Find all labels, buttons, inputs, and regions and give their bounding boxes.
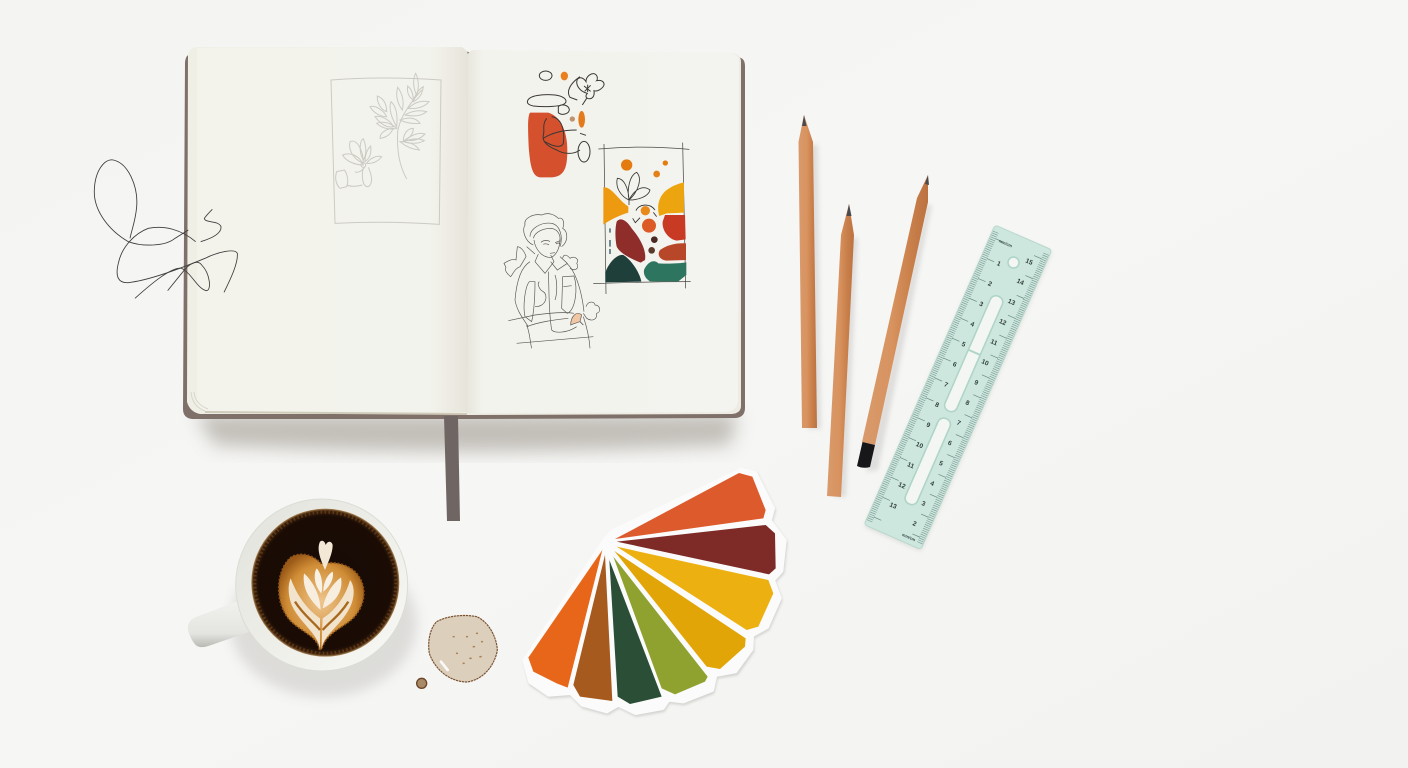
pencil 3 tip (925, 175, 929, 185)
cup outer rim (236, 499, 408, 671)
pencil 2 (827, 204, 858, 497)
ruler numbers: 1 (996, 260, 1002, 268)
ruler numbers: 5 (960, 341, 967, 349)
left page pencil sketch (331, 73, 441, 224)
small coffee drop (417, 678, 427, 688)
pencil 3 body (862, 175, 928, 445)
notebook (183, 47, 745, 521)
notebook shadow (195, 414, 738, 452)
left page layered edges (191, 392, 208, 411)
ruler numbers (875, 238, 1040, 542)
pencil 3 shadow (866, 205, 932, 472)
swatch: orange (528, 550, 602, 688)
figure line drawing (504, 214, 600, 348)
ruler numbers: 6 (951, 361, 958, 369)
ruler numbers: 13 (1007, 298, 1016, 307)
speckled crema ring (255, 512, 396, 653)
swatch: brown (573, 555, 612, 701)
colour study card (593, 143, 691, 294)
latte art (279, 541, 364, 650)
cup shadow (230, 550, 417, 697)
crema (279, 554, 364, 649)
ruler numbers: 4 (929, 480, 935, 488)
ruler numbers: 6 (947, 440, 953, 448)
colour fan (523, 470, 788, 717)
right page (467, 50, 739, 413)
ruler numbers: 9 (925, 422, 932, 430)
ruler numbers: 15 (1024, 258, 1034, 267)
ink scribble (94, 160, 237, 298)
left page stack (187, 47, 468, 414)
ruler body (864, 225, 1052, 549)
ruler tick marks (869, 232, 1046, 543)
pencil 2 shadow (835, 238, 858, 497)
pencil 1 shadow (806, 145, 821, 429)
right page stack (467, 50, 741, 415)
fan white backing (524, 470, 785, 713)
ruler numbers: 14 (1015, 278, 1025, 287)
ruler numbers: mm/cm (901, 532, 917, 542)
ruler numbers: 3 (978, 301, 984, 309)
coffee ring stain (429, 615, 497, 682)
ruler numbers: 8 (934, 401, 940, 409)
ruler numbers: 10 (915, 441, 924, 450)
ruler slots and hole (902, 255, 1023, 507)
ruler numbers: 12 (897, 481, 907, 491)
coffee cup (188, 499, 497, 697)
pencil 1 (798, 115, 821, 429)
ruler numbers: 2 (911, 520, 918, 528)
small flower (336, 139, 382, 188)
ruler numbers: 5 (938, 460, 944, 468)
coffee surface (251, 509, 399, 657)
card frame lines (593, 143, 691, 294)
swatch: maroon (617, 525, 776, 574)
ruler numbers: 8 (964, 399, 971, 407)
ruler numbers: mm/cm (998, 238, 1013, 249)
sketch frame (331, 78, 441, 224)
swatch: forest green (609, 560, 662, 704)
pencil 3 black eraser end (857, 442, 875, 468)
ruler numbers: 10 (980, 358, 990, 368)
pencil 1 body (798, 115, 817, 428)
swatch: olive (613, 557, 708, 694)
stain speckles (453, 633, 482, 663)
pencil 1 tip (802, 115, 806, 126)
ruler numbers: 4 (969, 321, 976, 329)
ruler numbers: 11 (906, 461, 915, 471)
red paint shape (528, 113, 567, 177)
fan shadow (523, 470, 788, 717)
foam leaves (289, 578, 320, 650)
pencil 2 tip (846, 204, 852, 216)
left page bottom edge (205, 412, 467, 414)
slot cross bar (968, 350, 980, 355)
bookmark ribbon (444, 416, 460, 521)
ruler numbers: 7 (955, 420, 962, 428)
branch (370, 73, 429, 179)
stain fill (429, 615, 497, 682)
orange dabs (561, 72, 568, 80)
ruler (863, 225, 1053, 552)
card flower (617, 172, 650, 205)
doodle ink lines (527, 71, 604, 162)
ruler numbers: 11 (989, 338, 999, 348)
ruler numbers: 3 (920, 500, 927, 508)
swatch: red orange (615, 473, 766, 539)
left page (197, 47, 468, 412)
stain rim (429, 615, 497, 682)
notebook cover (183, 49, 745, 419)
ruler numbers: 2 (987, 280, 993, 288)
ruler numbers: 7 (943, 381, 949, 389)
ruler shadow (864, 227, 1052, 552)
ruler numbers: 9 (973, 379, 980, 387)
stain highlight (441, 662, 448, 670)
card shapes (621, 159, 632, 171)
swatch: amber (614, 551, 746, 669)
right page sketches (504, 71, 691, 348)
cup handle (188, 601, 250, 647)
ruler numbers: 12 (998, 318, 1008, 327)
ruler numbers: 13 (888, 501, 898, 511)
pencil 3 (857, 175, 932, 472)
pencil 2 body (827, 204, 854, 497)
swatch: bright yellow (617, 547, 773, 630)
